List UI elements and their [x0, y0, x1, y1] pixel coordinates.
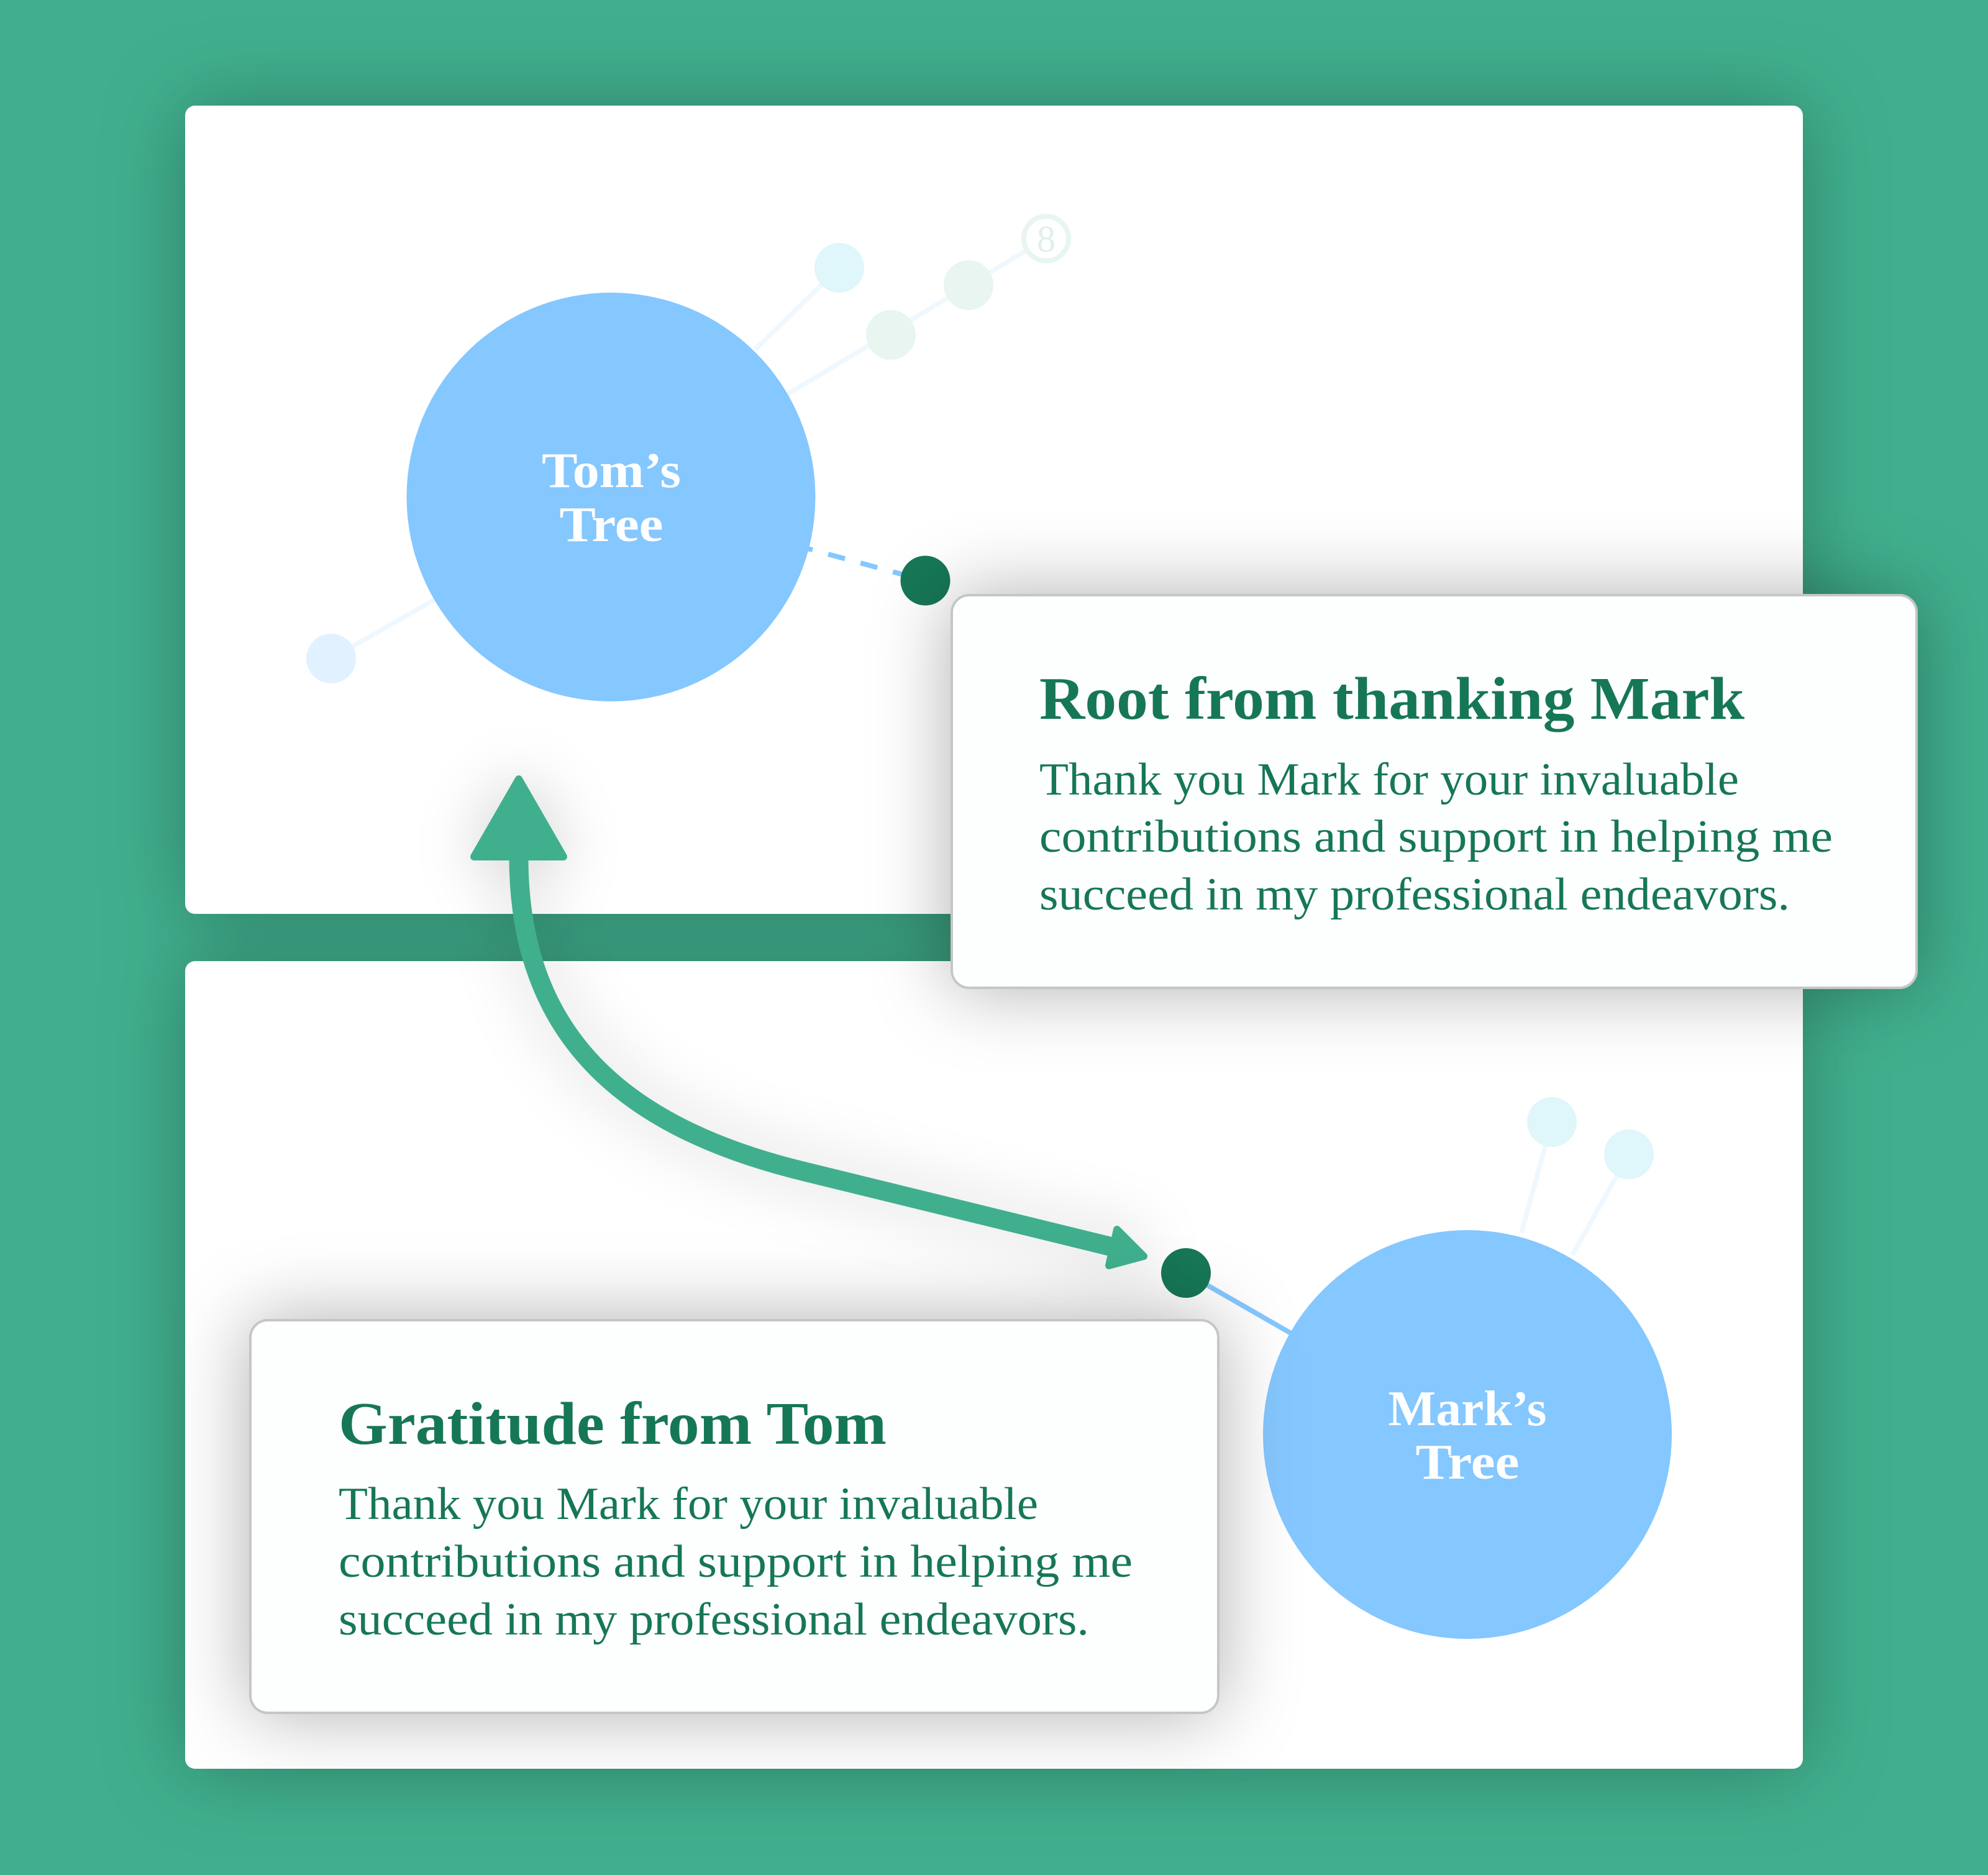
card heading: Root from thanking Mark [1039, 665, 1745, 732]
connector: Tom's root dashed line [796, 545, 925, 580]
tree: Mark's branches [1521, 1097, 1654, 1255]
connector: Mark's root line [1186, 1273, 1295, 1336]
card body text: succeed in my professional endeavors. [1039, 869, 1790, 920]
card heading: Gratitude from Tom [339, 1390, 887, 1458]
arrow: two-way curved connection [474, 779, 1144, 1266]
node: Tom's Tree: Tom’s [542, 444, 681, 498]
tree: Tom's branches: 8 [1037, 219, 1056, 260]
node: Tom's Tree [406, 293, 815, 701]
card body text: Thank you Mark for your invaluable [1039, 754, 1739, 805]
panels: top and bottom [185, 106, 1803, 1769]
tree: Tom's branches [306, 216, 1069, 683]
card body text: succeed in my professional endeavors. [339, 1594, 1089, 1645]
root dot: Mark [1161, 1248, 1211, 1298]
node: Mark's Tree [1263, 1230, 1672, 1639]
node: Mark's Tree: Tree [1415, 1435, 1520, 1490]
node: Mark's Tree: Mark’s [1388, 1382, 1547, 1436]
card: Root from thanking Mark [952, 595, 1917, 988]
card: Gratitude from Tom [250, 1320, 1218, 1713]
card body text [339, 1479, 1133, 1645]
card body text: Thank you Mark for your invaluable [339, 1479, 1038, 1530]
card body text [1039, 754, 1833, 920]
root dot: Tom [901, 555, 951, 605]
card body text: contributions and support in helping me [1039, 811, 1833, 862]
card body text: contributions and support in helping me [339, 1536, 1133, 1587]
node: Tom's Tree: Tree [559, 498, 663, 552]
